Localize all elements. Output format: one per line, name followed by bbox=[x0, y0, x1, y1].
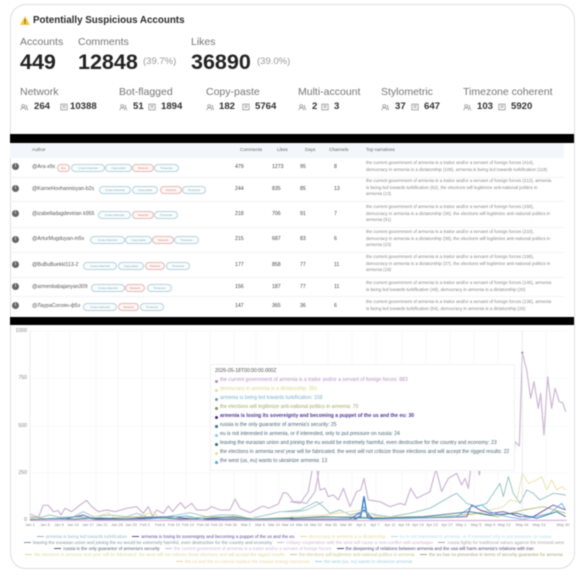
row: KarneHovhannisyan-b2s: is being led towards turkification (62), the elections will legitimize anti-national politics in bbox=[366, 185, 537, 190]
stat: multi-account bbox=[298, 86, 361, 112]
table header bbox=[10, 143, 564, 158]
row: ArturMugduyan: armenia (23) bbox=[366, 242, 391, 247]
row: BuBuBuekkl: Cross-channels bbox=[90, 264, 110, 268]
black divider top bbox=[10, 134, 574, 143]
row: BuBuBuekkl: democracy in armenia is a dictatorship (37), the elections will legitimize anti-national politics in bbox=[366, 261, 550, 266]
row: armenbabajanyan: Cross-channels bbox=[98, 286, 118, 290]
row: Ara-x9s: Copy-paste bbox=[111, 166, 126, 170]
row: izabelladagdevirian: Timezone bbox=[160, 213, 172, 217]
row: BuBuBuekkl: 77 bbox=[300, 262, 306, 268]
row: izabelladagdevirian: @izabelladagdevirian k955 bbox=[32, 211, 94, 217]
row: izabelladagdevirian: the current government of armenia is a traitor and/or a servant of foreign forces (156), bbox=[366, 204, 534, 209]
stat: network bbox=[20, 86, 98, 112]
stat: multi-account: 3 bbox=[334, 101, 339, 112]
row: BuBuBuekkl: 11 bbox=[334, 262, 339, 268]
row: BuBuBuekkl: i bbox=[15, 261, 16, 267]
row: izabelladagdevirian: 218 bbox=[235, 211, 244, 217]
x axis labels: May 13 bbox=[498, 522, 510, 527]
tooltip: russia is the only guarantor of armenia's security: 25 bbox=[220, 422, 337, 428]
stat: likes: 36890 bbox=[191, 50, 251, 74]
stat: bot-flagged: Bot-flagged bbox=[119, 86, 173, 98]
row: BuBuBuekkl bbox=[10, 252, 564, 278]
x axis labels: Mar 10 bbox=[268, 522, 280, 527]
chart legend: the us and the eu cannot replace the russian energy resources the west (us, eu) wants to ukrainize armenia bbox=[185, 559, 412, 564]
chart legend bbox=[24, 534, 564, 564]
row: BuBuBuekkl: 177 bbox=[235, 262, 244, 268]
series left half bbox=[30, 469, 323, 521]
row: KarneHovhannisyan-b2s: i bbox=[15, 185, 16, 191]
row: KarneHovhannisyan-b2s bbox=[10, 177, 564, 202]
row: LauraSogoyan: is being led towards turkification (54), democracy in armenia is a dictatorship (26) bbox=[366, 306, 525, 311]
row: KarneHovhannisyan-b2s: Network bbox=[166, 188, 176, 192]
panel: accounts table bbox=[10, 143, 564, 312]
stat: network: 264 bbox=[34, 101, 50, 112]
row: ArturMugduyan: the current government of armenia is a traitor and/or a servant of foreign forces (210), bbox=[366, 229, 534, 234]
x axis labels: Apr 15 bbox=[398, 522, 410, 527]
row: ArturMugduyan bbox=[10, 227, 564, 253]
x axis labels: Jan 13 bbox=[67, 522, 79, 527]
x axis labels: May 5 bbox=[471, 522, 481, 527]
stat: timezone coherent: 103 bbox=[477, 101, 493, 112]
y axis labels: 750 bbox=[18, 375, 27, 381]
x axis labels: Mar 14 bbox=[282, 522, 294, 527]
table header: Comments bbox=[240, 147, 262, 152]
row: BuBuBuekkl: @BuBuBuekkl113-2 bbox=[32, 262, 78, 268]
row: izabelladagdevirian: armenia (91) bbox=[366, 217, 391, 222]
table header: Channels bbox=[329, 147, 348, 152]
x axis labels: Jan 5 bbox=[40, 522, 50, 527]
row: LauraSogoyan: the current government of armenia is a traitor and/or a servant of foreign forces (138), armenia bbox=[366, 299, 551, 304]
x axis labels: Apr 11 bbox=[384, 522, 396, 527]
x axis labels: May 1 bbox=[456, 522, 466, 527]
row: ArturMugduyan: i bbox=[15, 236, 16, 242]
x axis labels: Feb 26 bbox=[225, 522, 237, 527]
tooltip: armenia is losing its sovereignty and becoming a puppet of the us and the eu: 30 bbox=[220, 413, 414, 419]
row: armenbabajanyan: @armenbabajanyan309 bbox=[32, 284, 87, 290]
row: Ara-x9s: Cross-channels bbox=[78, 166, 98, 170]
row: ArturMugduyan: 83 bbox=[300, 236, 306, 242]
row: KarneHovhannisyan-b2s: 835 bbox=[272, 186, 281, 192]
stat: timezone coherent: 5920 bbox=[511, 101, 532, 112]
x axis labels: Apr 23 bbox=[426, 522, 438, 527]
stat: bot-flagged bbox=[119, 86, 183, 112]
row: Ara-x9s bbox=[10, 158, 564, 178]
x axis labels: Apr 19 bbox=[412, 522, 424, 527]
tooltip bbox=[210, 364, 515, 471]
y axis labels: 500 bbox=[18, 423, 27, 429]
chart legend: leaving the eurasian union and joining the eu would be extremely harmful, even destructive for the country and economy military cooperation with the west will cause a new conflict with azerbaijan russia fights for traditional values against the immoral west bbox=[33, 540, 564, 545]
stat: network: Network bbox=[20, 86, 59, 98]
stat: multi-account: Multi-account bbox=[298, 86, 360, 98]
table header: Likes bbox=[277, 147, 288, 152]
row: izabelladagdevirian bbox=[10, 201, 564, 228]
row: KarneHovhannisyan-b2s: 13 bbox=[334, 186, 340, 192]
row: armenbabajanyan: 77 bbox=[300, 284, 306, 290]
row: Ara-x9s: 1273 bbox=[272, 164, 284, 170]
stat: stylometric bbox=[381, 86, 440, 112]
x axis labels: Mar 18 bbox=[296, 522, 308, 527]
row: Ara-x9s: Network bbox=[138, 166, 148, 170]
row: KarneHovhannisyan-b2s: 244 bbox=[235, 186, 244, 192]
y axis labels: 0 bbox=[24, 517, 27, 523]
row: BuBuBuekkl: Copy-paste bbox=[124, 264, 138, 268]
row: Ara-x9s: 95 bbox=[300, 164, 306, 170]
row: armenbabajanyan: is being led towards turkification (49), democracy in armenia is a dictatorship (20) bbox=[366, 287, 525, 292]
row: LauraSogoyan: Timezone bbox=[146, 305, 158, 309]
row: ArturMugduyan: Network bbox=[158, 238, 168, 242]
x axis labels: May 18 bbox=[516, 522, 528, 527]
x axis labels: Jan 25 bbox=[111, 522, 123, 527]
tooltip: democracy in armenia is a dictatorship: 351 bbox=[220, 386, 317, 392]
row: izabelladagdevirian: i bbox=[15, 210, 16, 216]
table header: Days bbox=[305, 147, 315, 152]
row: izabelladagdevirian: 7 bbox=[334, 211, 337, 217]
row: BuBuBuekkl: armenia (19) bbox=[366, 267, 391, 272]
row: LauraSogoyan: Network bbox=[123, 305, 134, 309]
x axis labels: Feb 14 bbox=[182, 522, 194, 527]
chart legend: the elections in armenia next year will be fabricated. the west will not criticize those elections and will accept the rigged results the elections will legitimize anti-national politics in armenia the eu has no preventive in terms of security guarantee for armenia bbox=[34, 552, 563, 557]
x axis labels: Apr 27 bbox=[441, 522, 453, 527]
row: KarneHovhannisyan-b2s: @KarneHovhannisyan-b2s bbox=[32, 186, 94, 192]
x axis labels: Mar 2 bbox=[241, 522, 251, 527]
stat: comments: Comments bbox=[78, 36, 129, 48]
stat: likes: (39.0%) bbox=[257, 56, 290, 67]
stat: multi-account: 2 bbox=[312, 101, 317, 112]
row: izabelladagdevirian: democracy in armenia is a dictatorship (36), the elections will legitimize anti-national politics in bbox=[366, 211, 550, 216]
x axis labels: Jan 1 bbox=[25, 522, 35, 527]
black divider bottom bbox=[10, 317, 574, 325]
row: ArturMugduyan: 6 bbox=[334, 236, 337, 242]
row: KarneHovhannisyan-b2s: Cross-channels bbox=[105, 188, 125, 192]
row: LauraSogoyan: 36 bbox=[300, 303, 306, 309]
stat: stylometric: Stylometric bbox=[381, 86, 433, 98]
row: Ara-x9s: i bbox=[15, 163, 16, 169]
table header: Top narratives bbox=[366, 147, 395, 152]
row: LauraSogoyan: 147 bbox=[235, 303, 244, 309]
y axis labels bbox=[15, 328, 28, 523]
x axis labels: Feb 22 bbox=[211, 522, 223, 527]
series right half bbox=[283, 330, 567, 521]
row: LauraSogoyan: 365 bbox=[272, 303, 281, 309]
row: ArturMugduyan: 215 bbox=[235, 236, 244, 242]
stat: accounts: 449 bbox=[20, 50, 56, 74]
stat: bot-flagged: 1894 bbox=[161, 101, 182, 112]
y axis labels: 250 bbox=[18, 470, 27, 476]
x axis labels: Apr 3 bbox=[356, 522, 366, 527]
stat: accounts bbox=[20, 36, 64, 74]
x axis labels: Feb 18 bbox=[197, 522, 209, 527]
row: KarneHovhannisyan-b2s: Copy-paste bbox=[138, 188, 152, 192]
row: Ara-x9s: 479 bbox=[235, 164, 244, 170]
row: ArturMugduyan: Timezone bbox=[180, 238, 193, 242]
table header: Author bbox=[32, 147, 46, 152]
stat: stylometric: 647 bbox=[424, 101, 440, 112]
row: armenbabajanyan: 187 bbox=[272, 284, 281, 290]
x axis labels: Jan 9 bbox=[54, 522, 64, 527]
row: ArturMugduyan: 687 bbox=[272, 236, 281, 242]
x axis labels: Feb 6 bbox=[155, 522, 165, 527]
x axis labels: Jan 21 bbox=[96, 522, 108, 527]
row: armenbabajanyan: i bbox=[15, 283, 16, 289]
row: Ara-x9s: @Ara-x9s bbox=[32, 164, 55, 170]
stat: comments: (39.7%) bbox=[143, 56, 176, 67]
row: KarneHovhannisyan-b2s: the current government of armenia is a traitor and/or a servant of foreign forces (213), armenia bbox=[366, 178, 551, 183]
row: armenbabajanyan: Network bbox=[130, 286, 140, 290]
stat: copy-paste: Copy-paste bbox=[206, 86, 260, 98]
x axis labels: May 30 bbox=[557, 522, 569, 527]
title: Potentially Suspicious Accounts bbox=[33, 15, 185, 26]
row: LauraSogoyan: @ЛаураСогоян-ф5э bbox=[32, 303, 80, 309]
tooltip: leaving the eurasian union and joining the eu would be extremely harmful, even destructive for the country and economy: 23 bbox=[220, 440, 497, 446]
stat: copy-paste: 5764 bbox=[255, 101, 276, 112]
x axis labels: Mar 22 bbox=[310, 522, 322, 527]
row: izabelladagdevirian: Cross-channels bbox=[105, 213, 124, 217]
icon: warning triangle bbox=[20, 16, 30, 26]
row: izabelladagdevirian: 91 bbox=[300, 211, 306, 217]
row: KarneHovhannisyan-b2s: 85 bbox=[300, 186, 306, 192]
row: LauraSogoyan bbox=[11, 299, 552, 312]
x axis labels: Mar 6 bbox=[255, 522, 265, 527]
row: armenbabajanyan: 11 bbox=[334, 284, 339, 290]
stat: comments: 12848 bbox=[78, 50, 138, 74]
row: LauraSogoyan: i bbox=[15, 302, 16, 308]
x axis labels: May 23 bbox=[533, 522, 545, 527]
row: BuBuBuekkl: 858 bbox=[272, 262, 281, 268]
stat: copy-paste bbox=[206, 86, 277, 112]
stat: stylometric: 37 bbox=[395, 101, 406, 112]
row: izabelladagdevirian: 706 bbox=[272, 211, 281, 217]
row: KarneHovhannisyan-b2s: armenia (13) bbox=[366, 191, 391, 196]
x axis labels: May 9 bbox=[485, 522, 495, 527]
row: Ara-x9s: Bot bbox=[61, 166, 66, 170]
row: LauraSogoyan: Cross-channels bbox=[90, 305, 110, 309]
row: ArturMugduyan: democracy in armenia is a dictatorship (38), the elections will legitimize anti-national politics in bbox=[366, 236, 550, 241]
x axis labels: Mar 30 bbox=[340, 522, 352, 527]
row: Ara-x9s: democracy in armenia is a dictatorship (108), armenia is being led towards turkification (118) bbox=[366, 167, 547, 172]
stat: comments bbox=[78, 36, 176, 74]
line chart bbox=[29, 330, 568, 522]
panel: summary bbox=[20, 14, 553, 112]
chart legend: russia is the only guarantor of armenia's security the current government of armenia is a traitor and/or a servant of foreign forces the deepening of relations between armenia and the usa will harm armenia's relations with iran bbox=[63, 546, 534, 551]
row: armenbabajanyan bbox=[10, 277, 564, 297]
stat: timezone coherent: Timezone coherent bbox=[463, 86, 552, 98]
row: LauraSogoyan: 6 bbox=[334, 303, 337, 309]
row: armenbabajanyan: 156 bbox=[235, 284, 244, 290]
chart legend: armenia is being led towards turkification armenia is losing its sovereignty and becoming a puppet of the us and the eu democracy in armenia is a dictatorship eu is not interested in armenia, or if interested only to put pressure on russia bbox=[46, 534, 551, 539]
row: ArturMugduyan: @ArturMugduyan-m5v bbox=[32, 236, 84, 242]
row: BuBuBuekkl: the current government of armenia is a traitor and/or a servant of foreign forces (199), bbox=[366, 254, 534, 259]
tooltip: 2026-05-18T00:00:00.000Z bbox=[215, 368, 276, 374]
row: KarneHovhannisyan-b2s: Timezone bbox=[188, 188, 200, 192]
row: izabelladagdevirian: Network bbox=[138, 213, 148, 217]
x axis labels: Jan 29 bbox=[125, 522, 137, 527]
x axis labels: Feb 2 bbox=[140, 522, 150, 527]
tooltip: eu is not interested in armenia, or if interested, only to put pressure on russia: 24 bbox=[220, 431, 400, 437]
row: BuBuBuekkl: Timezone bbox=[172, 264, 184, 268]
stat: likes bbox=[190, 36, 290, 74]
row: ArturMugduyan: Cross-channels bbox=[98, 238, 117, 242]
stat: likes: Likes bbox=[191, 36, 216, 48]
tooltip: the elections in armenia next year will be fabricated. the west will not criticize those elections and will accept the rigged results: 22 bbox=[220, 449, 509, 455]
row: BuBuBuekkl: Network bbox=[150, 264, 160, 268]
tooltip: the current government of armenia is a traitor and/or a servant of foreign forces: 883 bbox=[220, 377, 408, 383]
row: armenbabajanyan: the current government of armenia is a traitor and/or a servant of foreign forces (145), armenia bbox=[366, 280, 551, 285]
row: armenbabajanyan: Timezone bbox=[153, 286, 166, 290]
stat: network: 10388 bbox=[70, 101, 97, 112]
stat: bot-flagged: 51 bbox=[133, 101, 144, 112]
x axis labels: Apr 7 bbox=[370, 522, 380, 527]
row: Ara-x9s: the current government of armenia is a traitor and/or a servant of foreign forces (414), bbox=[366, 160, 534, 165]
tooltip: the west (us, eu) wants to ukrainize armenia: 13 bbox=[220, 458, 327, 464]
tooltip: armenia is being led towards turkification: 158 bbox=[220, 395, 322, 401]
stat: copy-paste: 182 bbox=[219, 101, 235, 112]
x axis labels: Jan 17 bbox=[82, 522, 94, 527]
x axis labels: Mar 26 bbox=[325, 522, 337, 527]
row: Ara-x9s: Timezone bbox=[160, 166, 173, 170]
row: ArturMugduyan: Copy-paste bbox=[131, 238, 146, 242]
stat: timezone coherent bbox=[462, 86, 553, 112]
x axis labels: Feb 10 bbox=[168, 522, 180, 527]
y axis labels: 1000 bbox=[15, 328, 27, 334]
stat: accounts: Accounts bbox=[20, 36, 63, 48]
tooltip: the elections will legitimize anti-national politics in armenia: 70 bbox=[220, 404, 358, 410]
row: Ara-x9s: 8 bbox=[334, 164, 337, 170]
